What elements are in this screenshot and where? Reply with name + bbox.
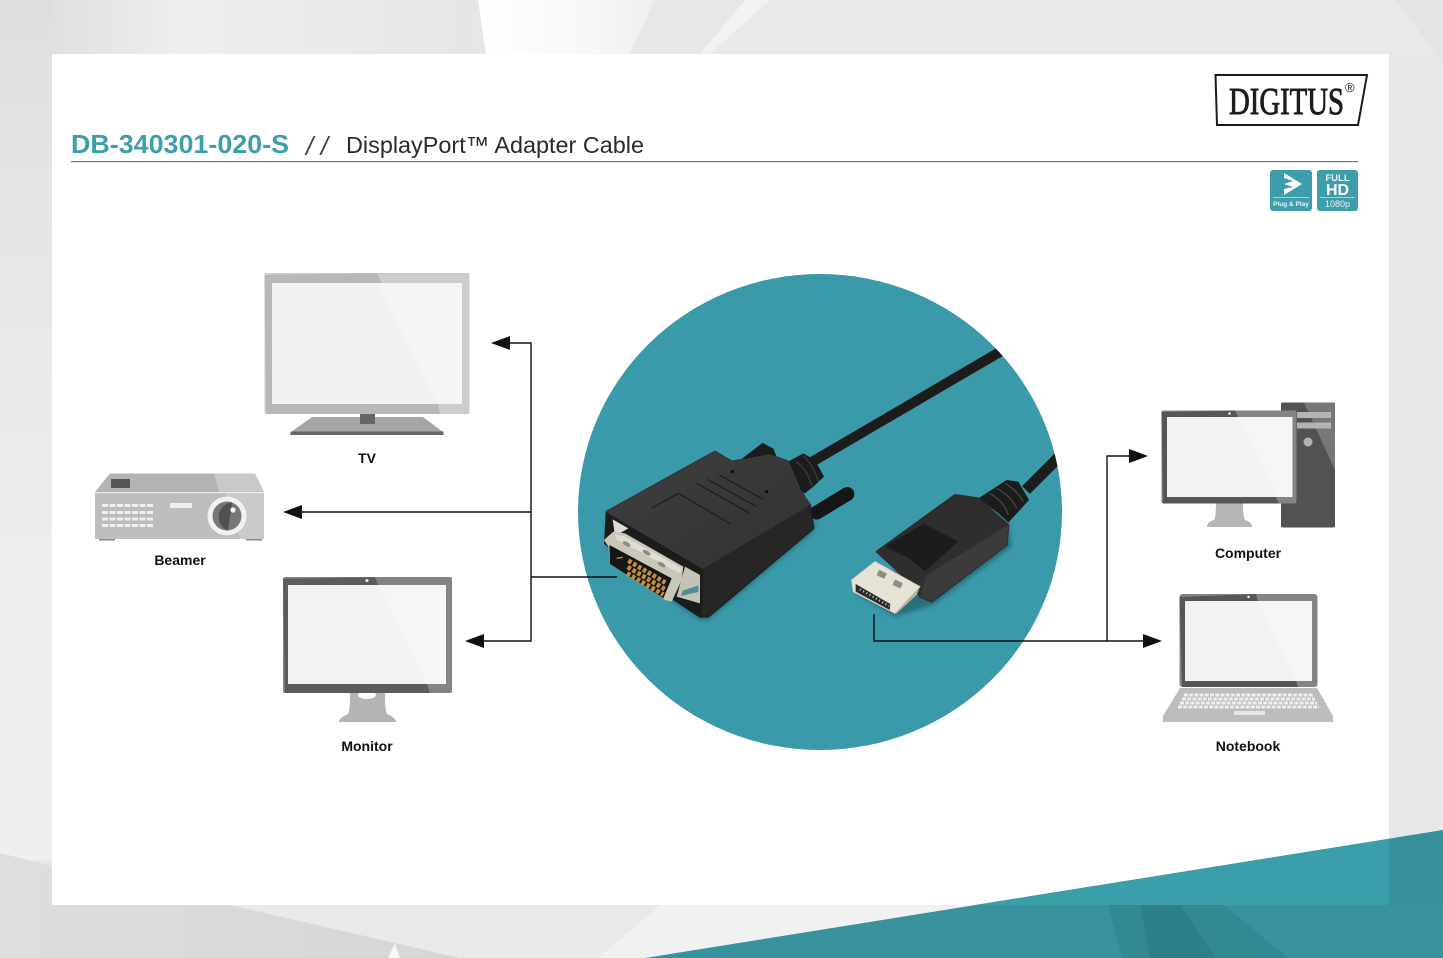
connector arrows: right side [874, 456, 1143, 641]
DisplayPort shadow [855, 523, 1012, 617]
computer tower [1281, 402, 1335, 528]
badge: Plug & Play [1270, 170, 1312, 211]
device: TV [264, 273, 470, 435]
device: Beamer [95, 474, 264, 540]
cable leading to DVI plug [807, 346, 1010, 513]
device: Monitor [283, 577, 452, 722]
separator slashes: // [304, 131, 331, 161]
DVI metal shell [604, 532, 683, 602]
product name: DisplayPort™ Adapter Cable [346, 132, 644, 158]
connector arrows: left side [300, 343, 617, 641]
DVI shadow [605, 520, 817, 620]
logo: Digitus [1216, 75, 1367, 125]
label: Computer: Computer [1215, 545, 1282, 561]
arrowhead: to Beamer [283, 505, 302, 519]
arrowhead: to Monitor [465, 634, 484, 648]
DisplayPort side face [920, 525, 1008, 602]
notebook base [1163, 688, 1333, 722]
label: TV: TV [358, 450, 377, 466]
projector lens [208, 496, 246, 536]
DVI connector insert [609, 545, 672, 598]
badge: Full HD 1080p [1317, 170, 1358, 211]
teal circle [578, 274, 1062, 750]
label: Beamer: Beamer [154, 552, 206, 568]
arrowhead: to TV [491, 336, 510, 350]
badge: Full HD 1080p: FULL [1325, 173, 1350, 184]
DisplayPort plug [852, 480, 1029, 617]
DVI plug [604, 444, 824, 620]
product code: DB-340301-020-S [71, 129, 289, 159]
DVI gold pins [627, 561, 665, 595]
DVI top face [607, 452, 810, 568]
DisplayPort strain relief [978, 480, 1029, 523]
badge: Full HD 1080p: HD [1326, 182, 1349, 199]
DisplayPort metal tip [852, 562, 920, 613]
logo wordmark: DIGITUS [1229, 81, 1344, 123]
DisplayPort body [877, 495, 1008, 602]
projector vents [102, 504, 153, 527]
label: Monitor: Monitor [341, 738, 393, 754]
label: Notebook: Notebook [1216, 738, 1280, 754]
device: Notebook [1163, 594, 1333, 722]
product photo: cable [604, 346, 1066, 620]
DVI strain relief [788, 453, 824, 493]
cable leading to DisplayPort plug [1022, 454, 1058, 494]
computer display stand [1207, 503, 1252, 527]
teal corner band [645, 830, 1443, 958]
DisplayPort latch [887, 525, 957, 570]
DVI upper screw [737, 444, 776, 464]
arrowhead: to Computer [1129, 449, 1148, 463]
computer display [1162, 410, 1296, 504]
notebook lid [1180, 594, 1318, 687]
DVI body silhouette [605, 452, 813, 617]
device: Computer [1162, 402, 1335, 528]
notebook keyboard [1178, 695, 1319, 707]
DVI corner tab [612, 519, 628, 533]
DVI side face [702, 505, 813, 617]
title: product code and name [71, 129, 644, 161]
badge: Plug & Play: Plug & Play [1273, 201, 1309, 208]
DVI moulded markings [652, 475, 763, 524]
registered mark: ® [1345, 80, 1355, 95]
badge: Full HD 1080p: 1080p [1325, 199, 1350, 209]
DVI right window [677, 567, 700, 603]
arrowhead: to Notebook [1143, 634, 1162, 648]
